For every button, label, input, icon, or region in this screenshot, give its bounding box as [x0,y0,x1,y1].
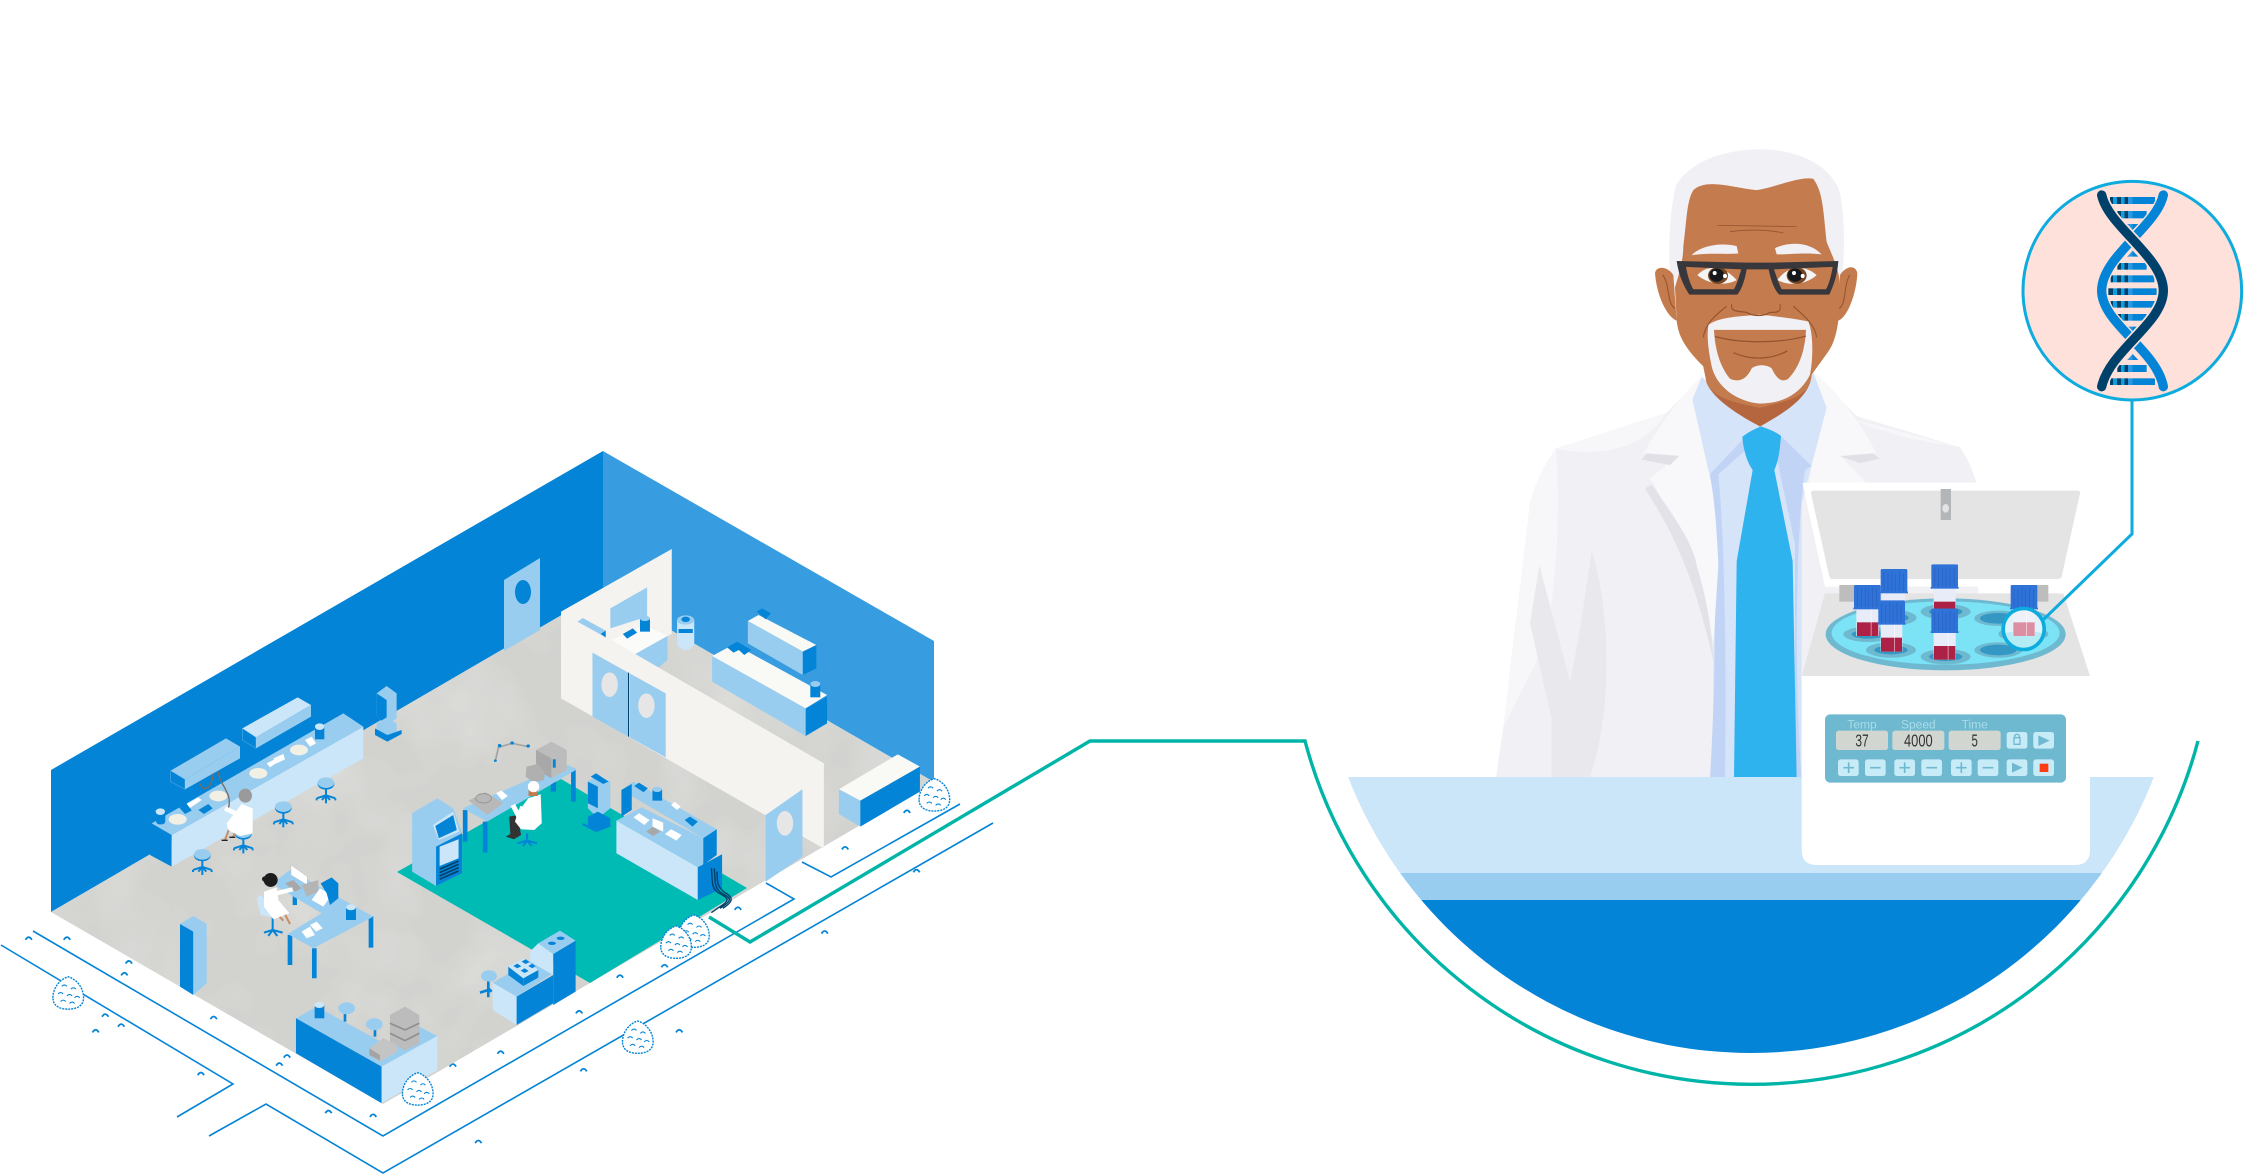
face [1675,178,1840,408]
stop button [2040,764,2048,772]
standing instrument on teal zone [583,773,610,832]
scientist at sink counter [200,772,253,841]
white partition wall [561,549,824,849]
eyes [1697,267,1817,284]
centrifuge body [1802,673,2090,865]
isometric laboratory room [1,451,993,1173]
back-right wall [603,451,934,782]
rotor plate [1826,598,2066,670]
sample tubes [1853,564,2044,660]
back wall unit [748,608,816,675]
tube magnified [2004,585,2044,650]
necktie [1734,426,1797,778]
double doors [592,653,666,757]
back-left wall [51,451,603,912]
control panel [1825,714,2066,783]
button symbols [1843,734,2050,773]
left-hand zone items [150,686,576,1103]
hair [1669,149,1844,292]
hinges [1839,585,2048,602]
base pair rungs [2108,197,2157,385]
display values: 4000 [1904,731,1933,751]
lab coat body [1496,373,1978,778]
doctor figure [1496,149,1978,778]
coat fold shading [1530,485,1713,777]
workbench with shelf [616,782,722,900]
front counter [296,1002,437,1103]
rotor chamber [1802,593,2090,676]
centrifuge machine [1802,483,2090,865]
panel labels: Temp [1847,717,1877,731]
lab table with instruments [463,741,577,853]
tube rear left [1880,569,1908,608]
L-shaped office desk [277,865,373,978]
ears [1655,267,1857,321]
niche window and shelf [577,587,667,667]
tube left [1853,585,1881,636]
bench cylinder [810,681,820,697]
panel labels: Time [1962,717,1988,731]
small stool near corner [480,970,497,997]
panel displays [1836,731,2001,750]
rotor wells [1843,604,2048,664]
display values [1855,731,1978,751]
end door [766,789,802,882]
magnifier leader line [2043,398,2132,620]
shirt [1692,373,1827,778]
long sink counter [150,713,363,867]
grey floor [51,591,934,1104]
tube front left [1878,600,1906,652]
tall storage column [180,916,207,995]
panel labels [1847,717,1988,731]
seated scientist on teal zone [506,781,542,846]
panel buttons [1838,732,2054,776]
DNA magnified circle [2023,181,2242,400]
ground outlines: paths and kerbs [1,804,993,1173]
circle background [2023,181,2242,400]
display values: 5 [1971,731,1978,751]
wall mounted cabinets [171,697,311,789]
tube rear centre [1931,564,1959,609]
wall door with porthole [504,558,540,651]
tube front centre [1931,609,1959,660]
panel labels: Speed [1901,717,1936,731]
eyebrows [1692,244,1822,255]
neck [1703,366,1812,426]
tall water cylinder [677,615,694,650]
right-hand zone items [412,549,920,913]
coat highlights [1496,413,1960,778]
mobile instrument tower [375,686,402,742]
display values: 37 [1855,731,1869,751]
kiosk instrument [412,798,462,886]
cable bundle [711,868,731,913]
teal floor zone [397,779,747,983]
teal callout connector and circle arc [709,741,2198,1084]
corner cabinets with heating block [493,931,576,1025]
magnifier ring on tube [2003,608,2044,650]
back bench [712,642,827,736]
glasses [1677,261,1838,295]
front right cabinet [839,754,920,827]
floor stools [193,777,335,875]
open lid [1803,483,2088,587]
coat lapels [1642,373,1879,661]
goatee beard [1708,315,1812,404]
laboratory bench [1348,777,2154,1053]
decorative shrubs [53,779,950,1105]
helix strands [2102,195,2163,387]
scientist at desk [257,873,293,936]
grass tufts [26,810,920,1143]
facial lines [1663,225,1850,358]
